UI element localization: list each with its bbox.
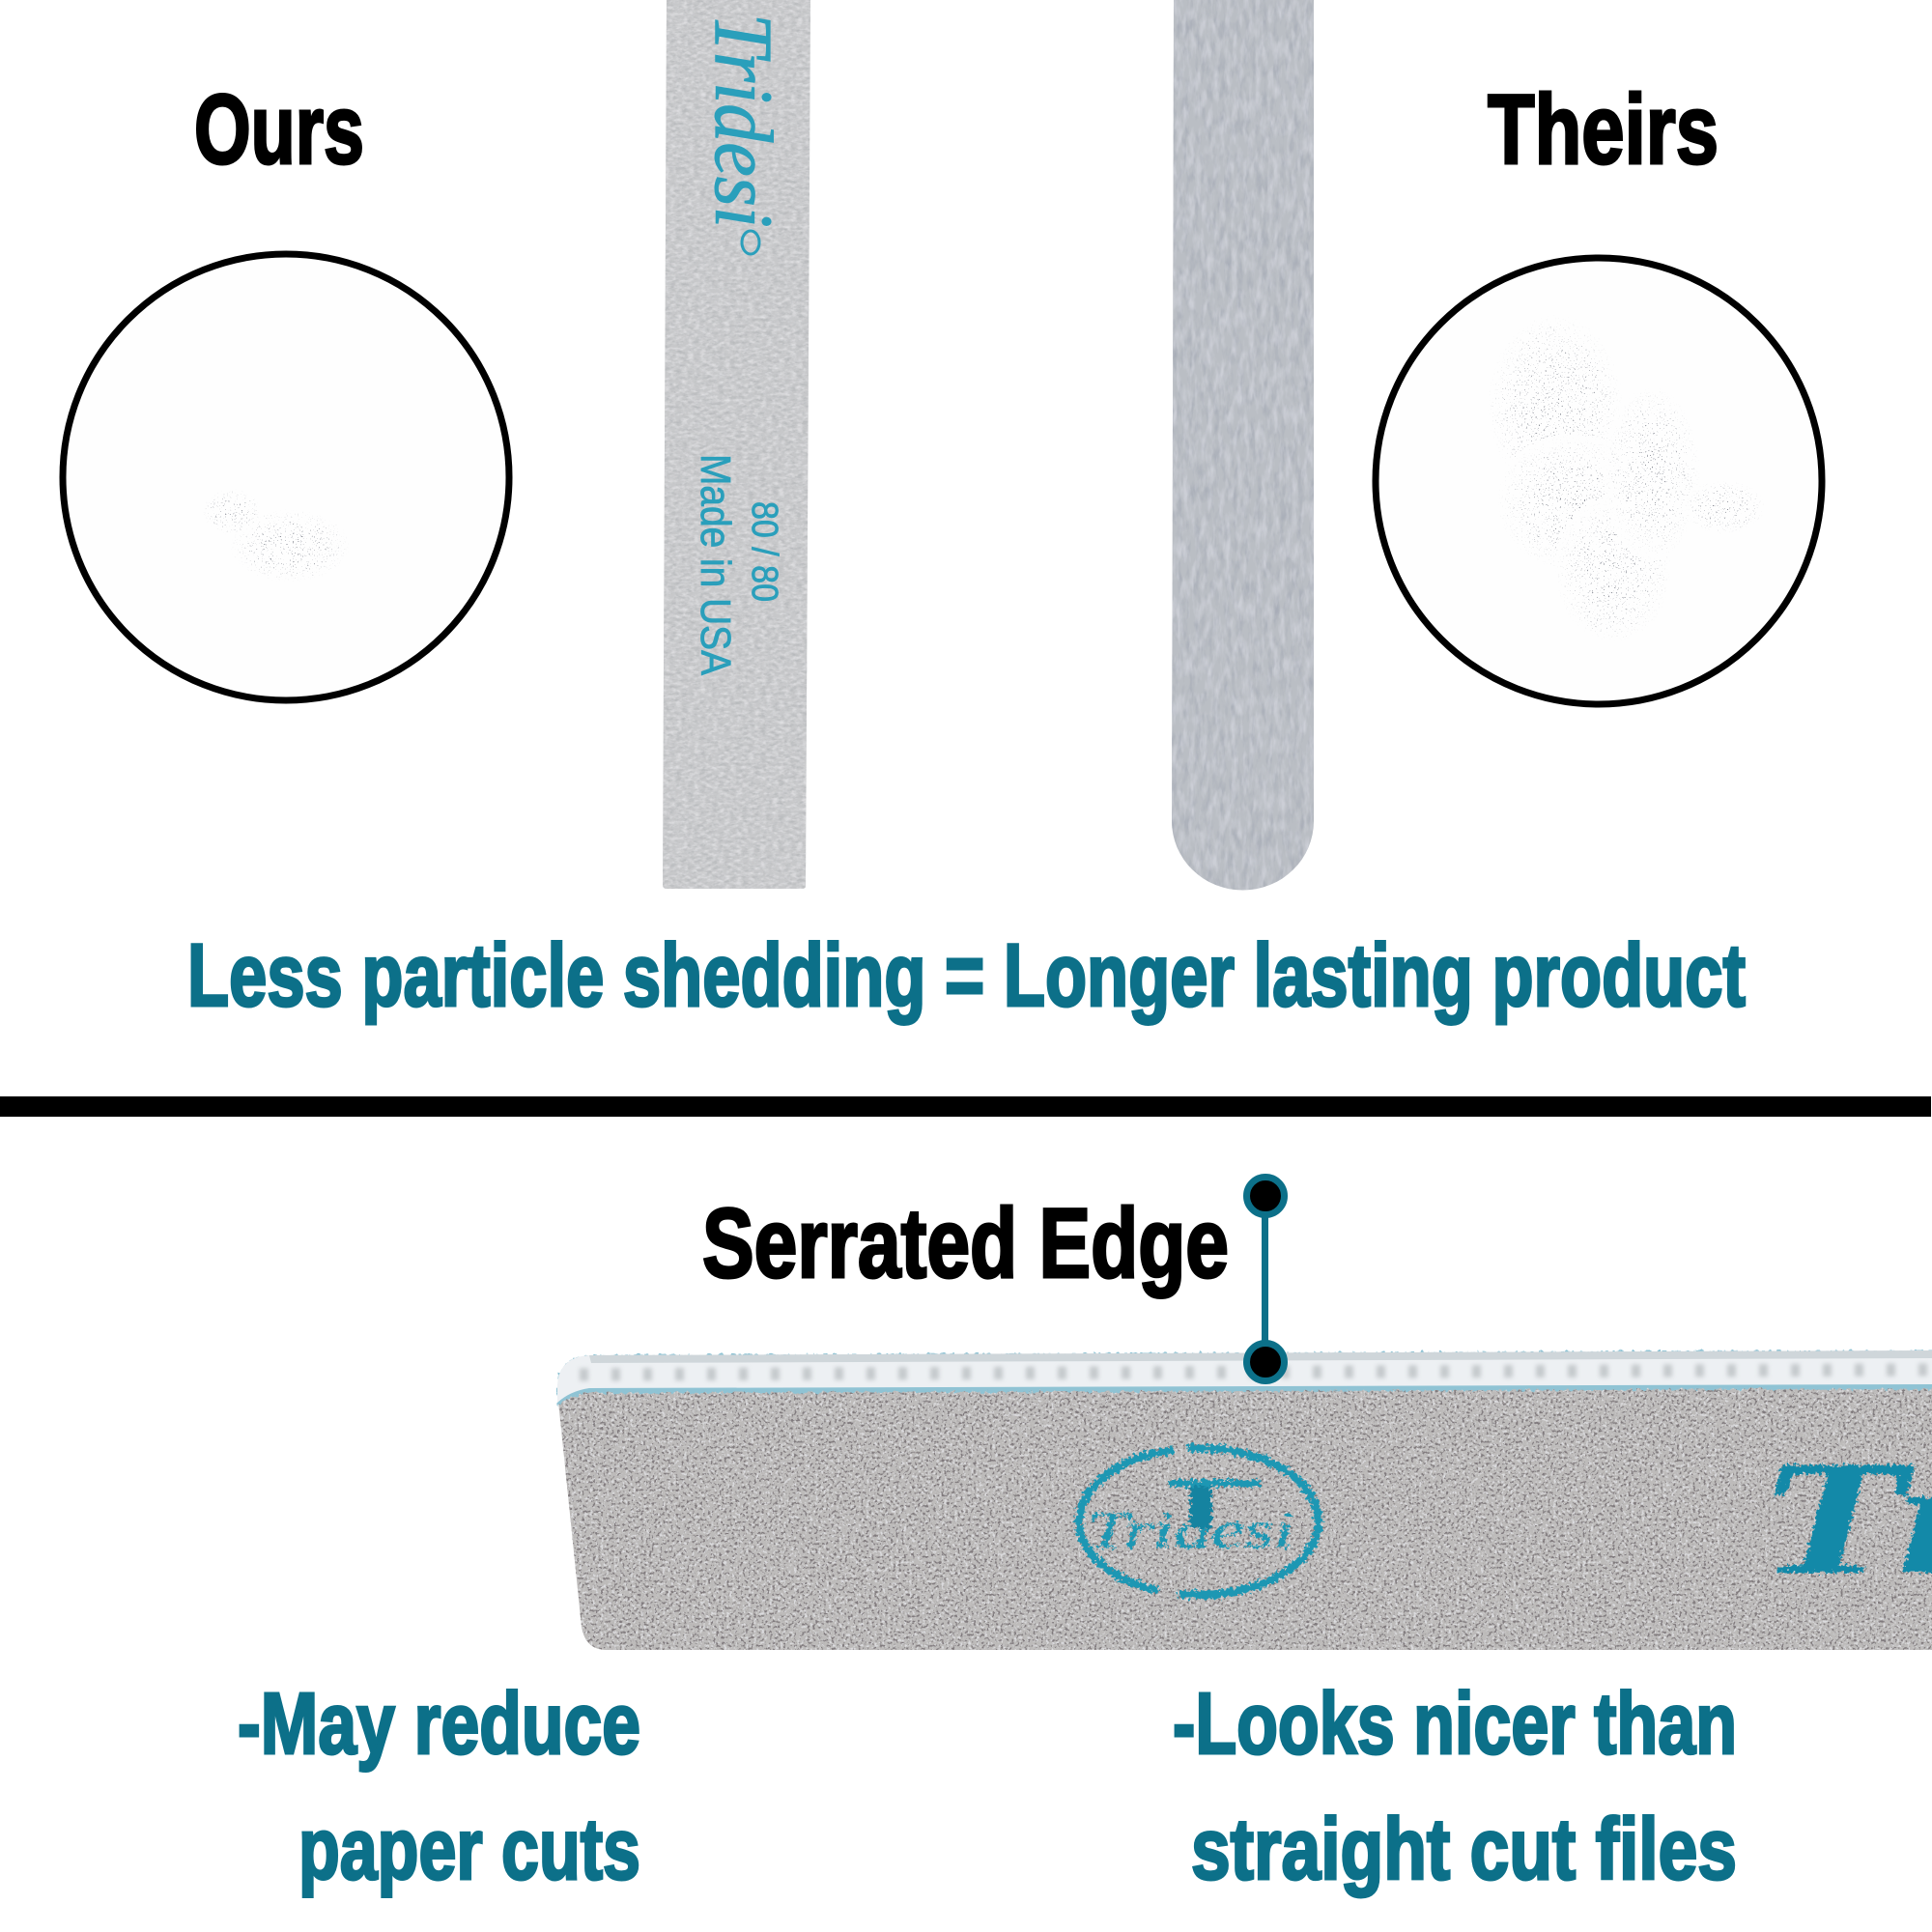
panel: our particle residue circle: [58, 251, 522, 715]
white serrated edge strip: [557, 1350, 1932, 1406]
benefit text: looks nicer: -Looks nicer than: [1173, 1676, 1737, 1773]
connector top dot: [1246, 1177, 1285, 1215]
panel: their particle residue circle: [1372, 256, 1826, 710]
divider bar: [0, 1096, 1931, 1117]
stamped round logo: [1079, 1448, 1319, 1595]
callout connector: [1246, 1177, 1285, 1381]
brand print on file: Tridesi: [697, 14, 790, 228]
connector bottom dot: [1246, 1343, 1285, 1381]
heading: Serrated Edge: Serrated Edge: [702, 1188, 1229, 1298]
grit print on file: 80 / 80: [744, 501, 784, 602]
serrated edge file, horizontal: [557, 1350, 1932, 1650]
origin print on file: Made in USA: [692, 454, 739, 676]
large stamped brand lettering: Tr: [1756, 1427, 1932, 1608]
benefit text: may reduce paper cuts: paper cuts: [298, 1802, 640, 1898]
benefit text: may reduce paper cuts: [238, 1676, 640, 1898]
heading: Theirs: Theirs: [1488, 74, 1719, 185]
our nail file, vertical: [663, 0, 810, 889]
benefit text: looks nicer: [1173, 1676, 1737, 1898]
registered mark on file: [742, 231, 759, 254]
stamped round logo: Tridesi: [1087, 1501, 1294, 1559]
competitor nail file, vertical: [1172, 0, 1314, 890]
heading: Ours: Ours: [194, 74, 364, 185]
benefit text: looks nicer: straight cut files: [1191, 1802, 1737, 1898]
benefit text: may reduce paper cuts: -May reduce: [238, 1676, 640, 1773]
